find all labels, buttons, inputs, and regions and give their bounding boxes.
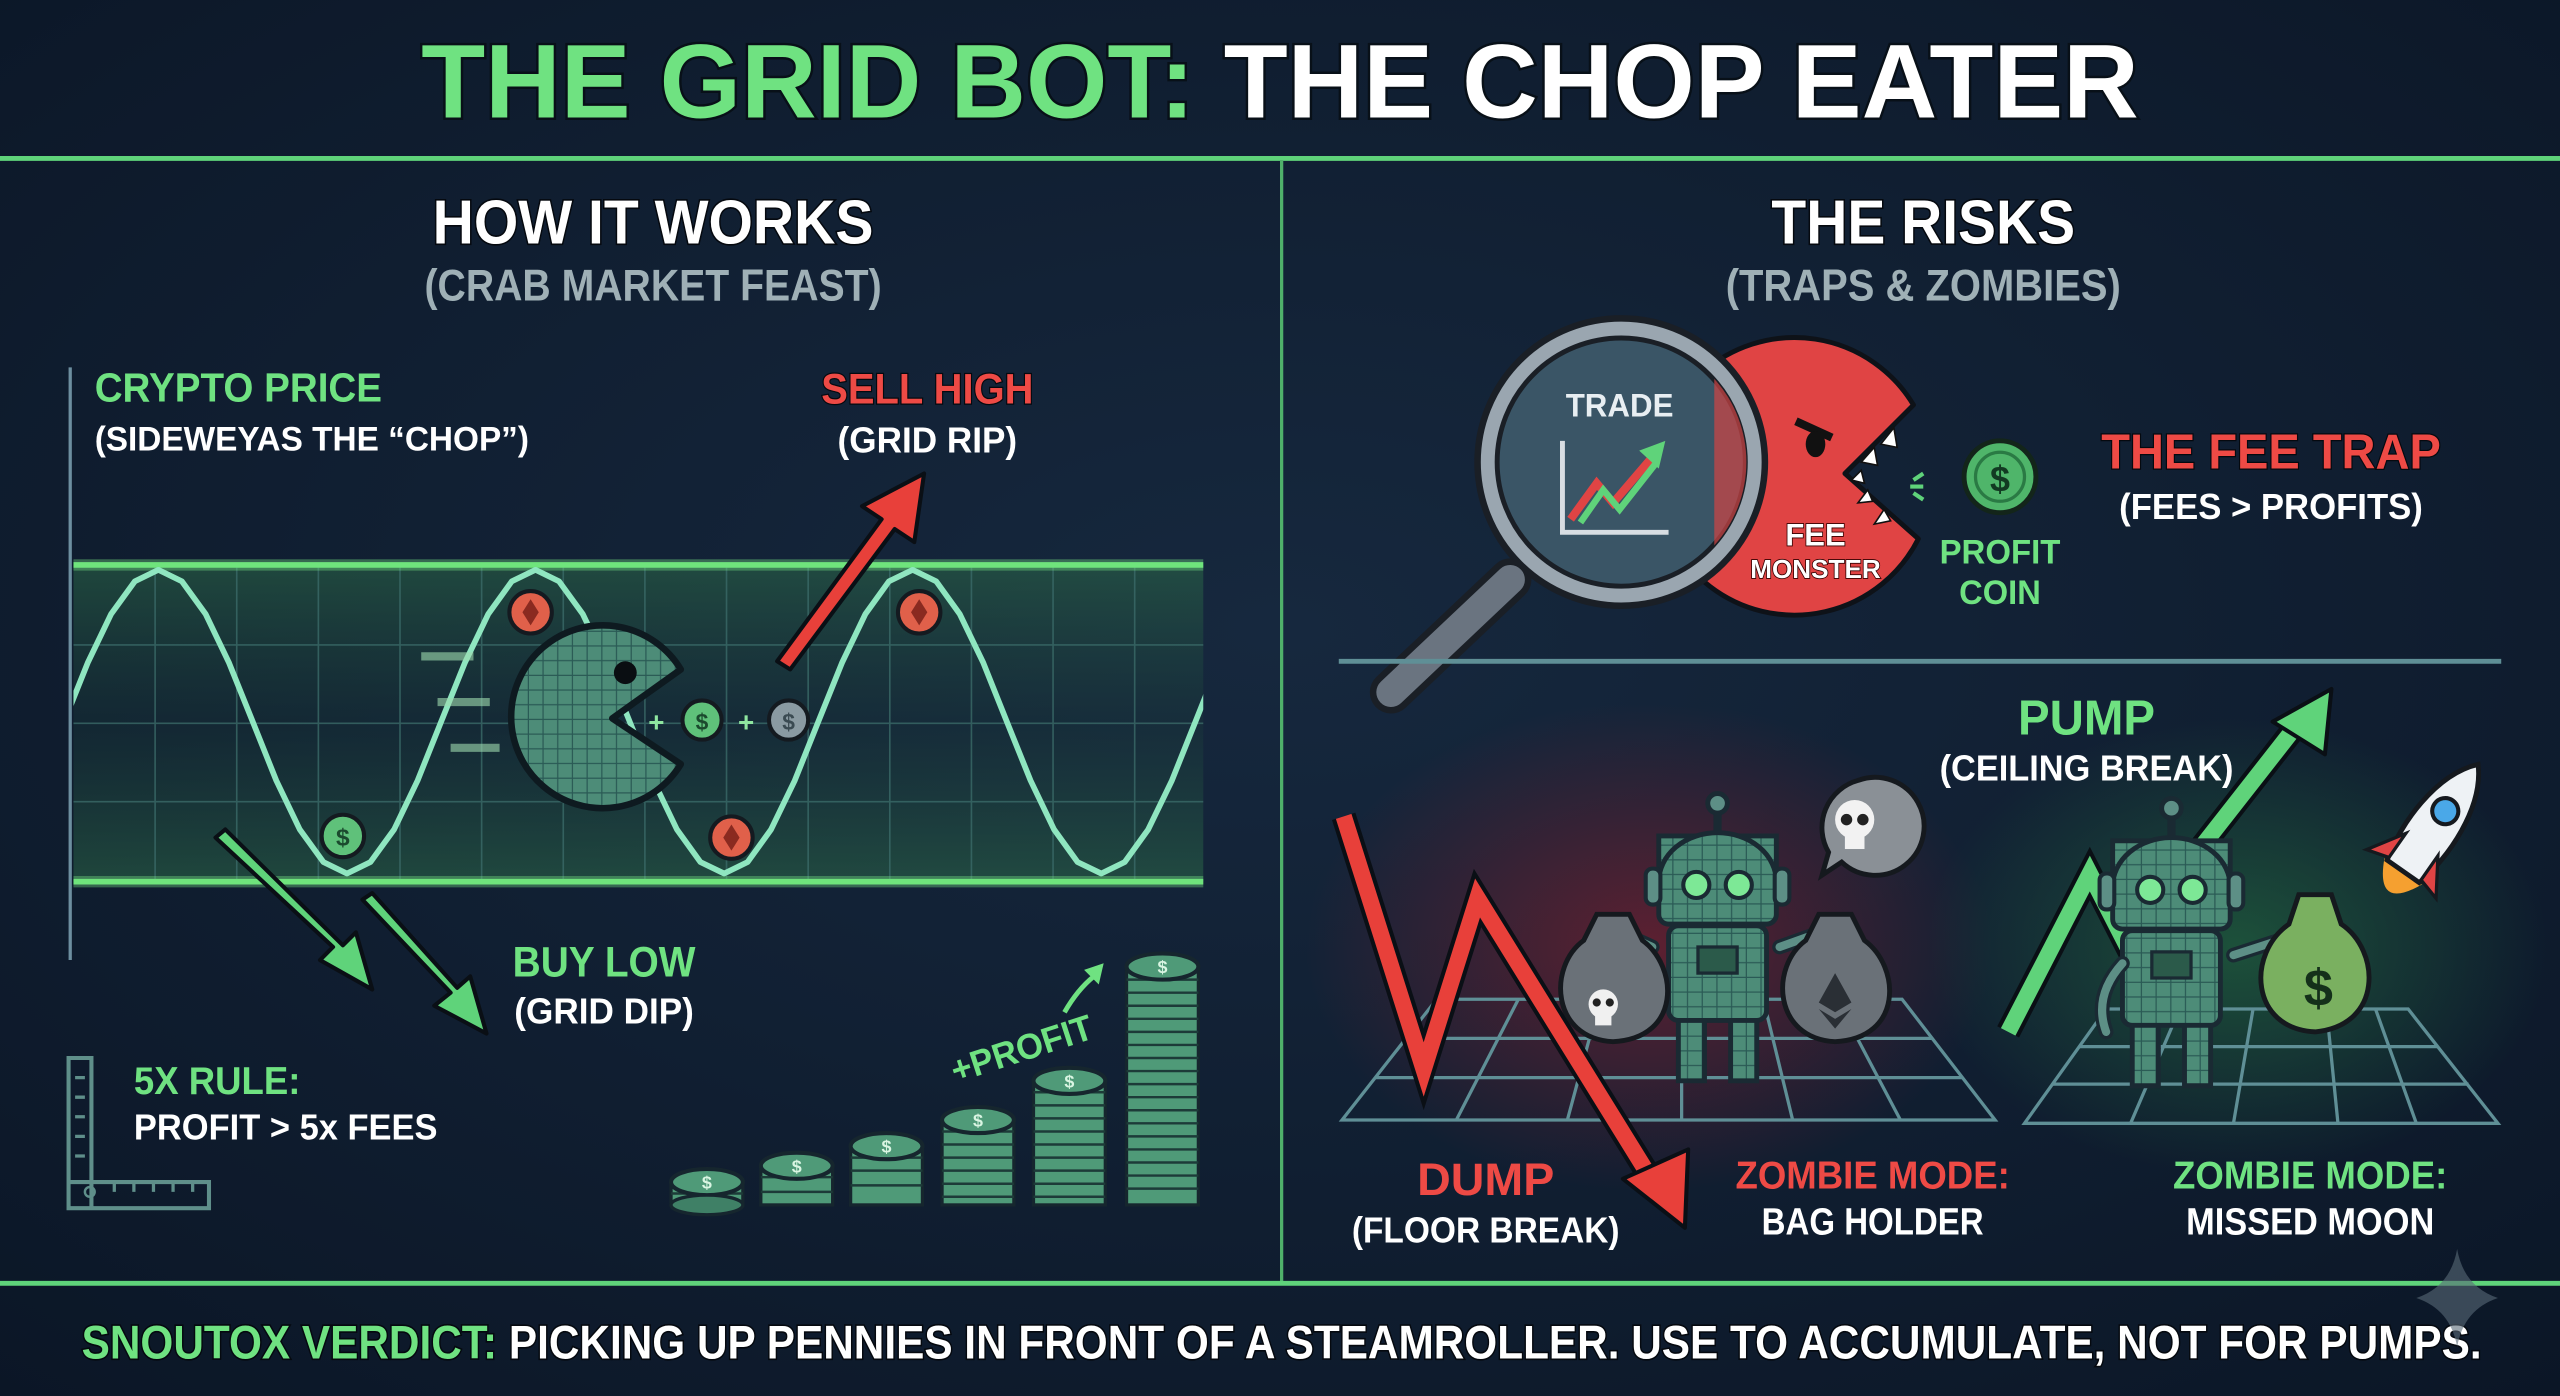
chart: coin stacks: $ bbox=[1064, 1071, 1074, 1091]
heading: how it works: HOW IT WORKS bbox=[433, 188, 873, 257]
label: dump: (FLOOR BREAK) bbox=[1352, 1209, 1620, 1250]
heading: the risks: (TRAPS & ZOMBIES) bbox=[1726, 261, 2121, 310]
label: sell high: (GRID RIP) bbox=[838, 419, 1017, 460]
icon: fee monster: FEE bbox=[1785, 517, 1846, 552]
heading: how it works bbox=[424, 188, 882, 310]
label: +profit: +PROFIT bbox=[945, 1006, 1098, 1091]
text: the fee trap bbox=[2101, 426, 2441, 527]
icon: magnifier on trade: TRADE bbox=[1566, 386, 1673, 423]
panel: the risks bbox=[1306, 188, 2547, 1250]
scene: dump / bag holder bbox=[1306, 702, 2010, 1250]
text: the fee trap: (FEES > PROFITS) bbox=[2119, 486, 2423, 527]
chart: coin stacks: $ bbox=[792, 1156, 802, 1176]
floor grid bbox=[1342, 999, 1995, 1120]
text: 5x rule bbox=[134, 1060, 438, 1148]
label: zombie mode missed moon: ZOMBIE MODE: bbox=[2173, 1155, 2447, 1198]
icon: profit coin: PROFIT bbox=[1940, 533, 2060, 571]
icon: robot missed moon bbox=[2100, 798, 2369, 1086]
icon: robot missed moon: $ bbox=[2304, 960, 2333, 1018]
label: zombie mode missed moon: MISSED MOON bbox=[2186, 1200, 2434, 1242]
text: 5x rule: 5X RULE: bbox=[134, 1060, 300, 1103]
chart: coin stacks: $ bbox=[702, 1173, 712, 1193]
text: 5x rule: PROFIT > 5x FEES bbox=[134, 1107, 438, 1148]
label: buy low: (GRID DIP) bbox=[514, 991, 694, 1032]
heading: the risks: THE RISKS bbox=[1771, 188, 2075, 257]
icon: profit coin: $ bbox=[1990, 458, 2010, 499]
icon: robot bag holder bbox=[1561, 794, 1890, 1081]
icon: fee monster bbox=[1656, 338, 1918, 615]
icon: red sell coins bbox=[509, 591, 940, 859]
label: dump bbox=[1352, 1154, 1620, 1250]
label: pump bbox=[1940, 692, 2233, 788]
label: crypto price: CRYPTO PRICE bbox=[95, 365, 382, 411]
label: pump: PUMP bbox=[2018, 692, 2155, 746]
arrow: sell up red bbox=[777, 474, 924, 669]
icon: grid pacman eating coins bbox=[421, 625, 808, 808]
label: sell high: SELL HIGH bbox=[821, 365, 1033, 412]
chart: coin stacks: $ bbox=[973, 1111, 983, 1131]
icon: fee monster: MONSTER bbox=[1750, 554, 1881, 584]
arrow: dump red bbox=[1344, 816, 1688, 1228]
icon: grid pacman eating coins: + bbox=[648, 706, 664, 737]
icon: grid pacman eating coins: $ bbox=[696, 709, 709, 735]
label: buy low: BUY LOW bbox=[513, 938, 696, 985]
dividers bbox=[0, 157, 2560, 160]
icon: rocket bbox=[2354, 740, 2513, 916]
heading: how it works: (CRAB MARKET FEAST) bbox=[424, 261, 882, 310]
chart: price band with sine wave bbox=[64, 367, 1219, 960]
scene: pump / missed moon bbox=[1927, 689, 2547, 1242]
icon: grid pacman eating coins: + bbox=[738, 706, 754, 737]
icon: grid pacman eating coins: $ bbox=[782, 709, 795, 735]
chart: coin stacks: $ bbox=[882, 1137, 892, 1157]
icon: skull speech bubble bbox=[1822, 777, 1924, 875]
icon: green buy coin bbox=[322, 815, 364, 857]
label: sell high bbox=[821, 365, 1033, 460]
label: dump: DUMP bbox=[1417, 1154, 1554, 1205]
label: zombie mode bag holder: BAG HOLDER bbox=[1762, 1200, 1984, 1242]
title: THE GRID BOT: THE CHOP EATER bbox=[421, 24, 2139, 141]
label: zombie mode missed moon bbox=[2173, 1155, 2447, 1242]
label: crypto price bbox=[95, 365, 529, 459]
icon: magnifier on trade bbox=[1391, 318, 1765, 692]
arrow: pump green bbox=[2008, 689, 2331, 1032]
label: zombie mode bag holder: ZOMBIE MODE: bbox=[1736, 1155, 2010, 1198]
heading: the risks bbox=[1726, 188, 2121, 310]
label: +profit bbox=[945, 963, 1104, 1091]
icon: profit coin bbox=[1910, 441, 2060, 612]
icon: profit coin: COIN bbox=[1959, 574, 2041, 612]
floor grid bbox=[2024, 1009, 2498, 1123]
label: zombie mode bag holder bbox=[1736, 1155, 2010, 1242]
label: pump: (CEILING BREAK) bbox=[1940, 747, 2233, 788]
icon: sparkle watermark bbox=[2416, 1249, 2498, 1347]
arrows: buy low green bbox=[216, 829, 487, 1034]
text: the fee trap: THE FEE TRAP bbox=[2101, 426, 2441, 480]
icon: ruler bbox=[69, 1058, 209, 1208]
chart: coin stacks bbox=[671, 954, 1198, 1215]
label: crypto price: (SIDEWEYAS THE “CHOP”) bbox=[95, 421, 529, 459]
label: buy low bbox=[513, 938, 696, 1032]
chart: coin stacks: $ bbox=[1157, 957, 1167, 977]
panel: how it works bbox=[64, 188, 1219, 1215]
icon: green buy coin: $ bbox=[336, 825, 350, 852]
